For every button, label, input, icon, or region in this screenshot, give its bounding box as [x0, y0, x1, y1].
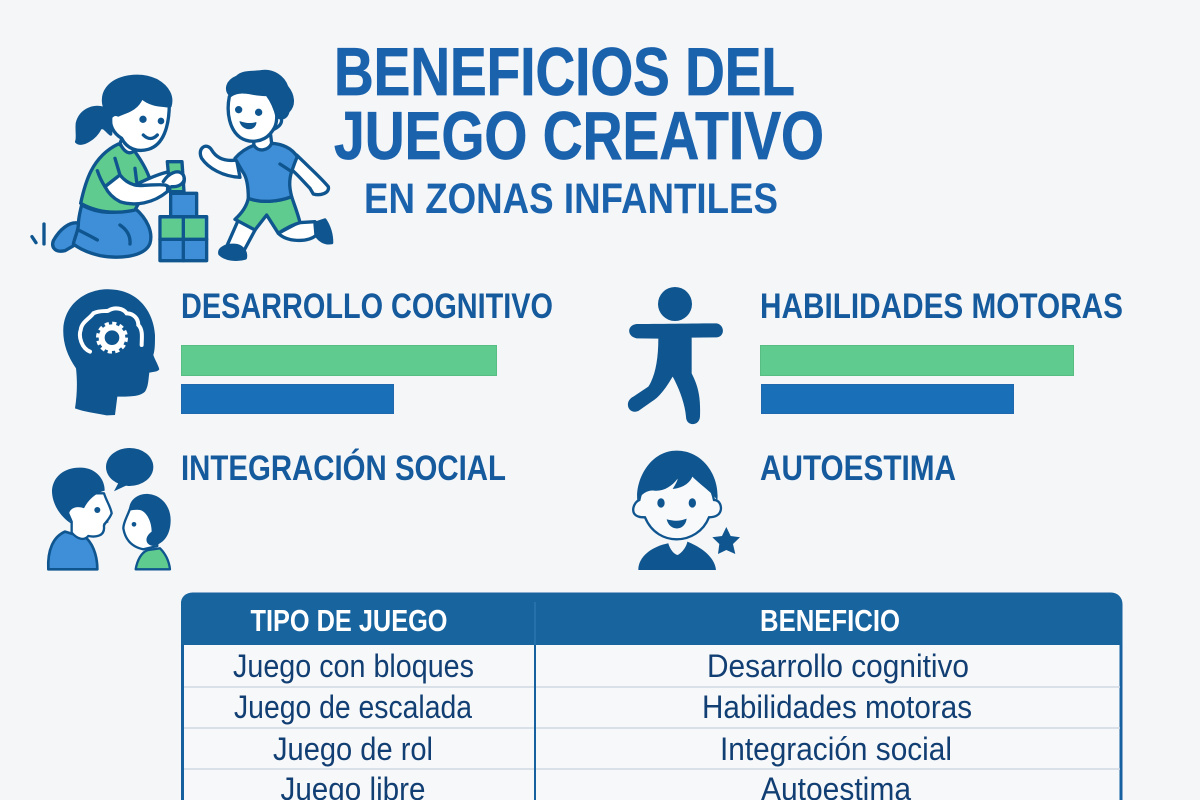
panel: desarrollo cognitivo — [181, 287, 553, 414]
boy — [200, 71, 332, 259]
table rows — [233, 648, 972, 800]
girl — [53, 76, 184, 257]
icon: smiling child with star — [633, 451, 740, 570]
title: BENEFICIOS DEL — [334, 34, 795, 110]
blocks — [160, 162, 207, 261]
heading: autoestima: AUTOESTIMA — [760, 449, 956, 488]
table rows: Integración social — [720, 731, 952, 767]
table rows: Juego de rol — [273, 731, 433, 767]
panel: habilidades motoras — [760, 287, 1123, 414]
panel: habilidades motoras: HABILIDADES MOTORAS — [760, 287, 1123, 326]
icon: moving figure — [628, 287, 723, 424]
icon: head with gear — [63, 289, 159, 415]
heading: integración social: INTEGRACIÓN SOCIAL — [181, 448, 506, 488]
title: JUEGO CREATIVO — [334, 98, 824, 174]
table rows: Juego con bloques — [233, 648, 474, 684]
table rows: Habilidades motoras — [702, 689, 972, 725]
panel: desarrollo cognitivo: DESARROLLO COGNITIVO — [181, 287, 553, 326]
table rows: Desarrollo cognitivo — [707, 648, 969, 684]
title: EN ZONAS INFANTILES — [364, 175, 778, 223]
table header — [250, 603, 900, 638]
illustration: children playing with blocks — [32, 71, 332, 261]
table header: TIPO DE JUEGO — [250, 603, 448, 638]
icon: two children talking — [48, 448, 171, 569]
title — [334, 34, 824, 223]
motion marks — [32, 224, 44, 244]
table: tipo de juego y beneficio — [181, 593, 1122, 800]
table header: BENEFICIO — [760, 603, 900, 638]
table rows: Juego de escalada — [234, 689, 472, 725]
